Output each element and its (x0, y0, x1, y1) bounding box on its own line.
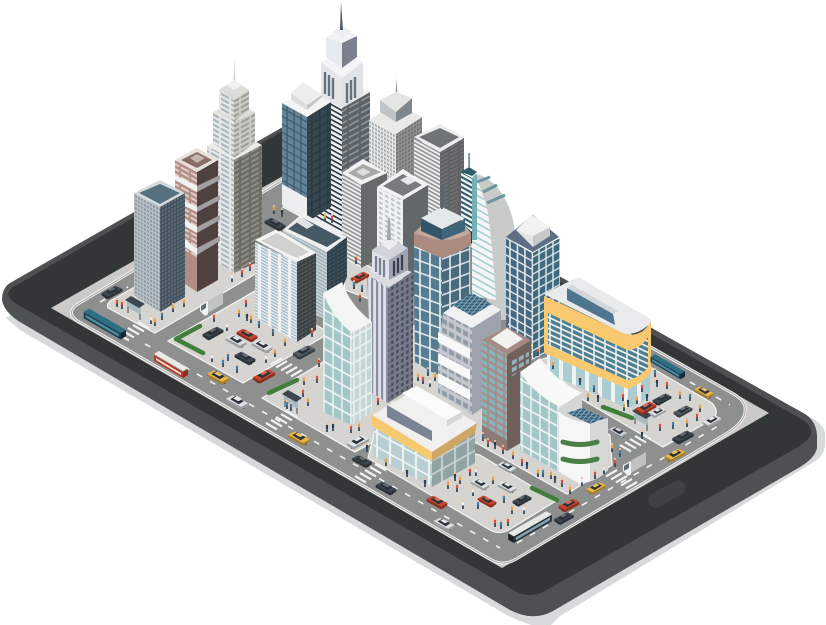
pedestrians (116, 205, 701, 529)
building: low yellow-trim glass hall (372, 386, 477, 487)
building: white front office (255, 229, 316, 342)
tablet screen bezel (8, 128, 811, 595)
building: grey tower with antenna (369, 78, 422, 235)
building: solar roof balcony tower (438, 293, 501, 415)
building: brown balcony tower (175, 148, 220, 292)
icon: tablet home button (646, 478, 688, 510)
building: tall main tower with spire (315, 2, 370, 240)
tablet body (2, 124, 817, 616)
hedges (176, 326, 632, 500)
building: white terraced glass building (520, 358, 608, 484)
building: curved striped sail tower (461, 153, 515, 320)
vehicle: white truck right (623, 451, 648, 476)
vehicle: white bus (508, 511, 552, 543)
crosswalks (118, 322, 651, 488)
building: stepped beige tower with antenna (207, 58, 262, 273)
vehicle: white truck left (200, 291, 225, 316)
cars (102, 218, 721, 531)
building: narrow grey midrise (342, 159, 387, 268)
building: teal low block (283, 213, 347, 320)
building: glass tower with curved white roof (323, 282, 372, 425)
building: dark glass tower (282, 82, 331, 222)
road network (72, 160, 744, 562)
building: curved brown-crowned glass tower (414, 187, 471, 378)
building: yellow curved building (544, 277, 651, 408)
vehicle: blue bus left (84, 309, 126, 339)
bus stops (125, 296, 652, 431)
building: far right grey tower (414, 124, 464, 245)
tablet shadow (6, 130, 825, 625)
building: leftmost slate tower (134, 180, 185, 312)
building: blue glass tower (506, 215, 560, 360)
building: white office tower (377, 169, 428, 300)
building: brown small tower (482, 315, 531, 451)
building: empire-style small tower (367, 218, 413, 403)
vehicle: blue bus right (650, 354, 685, 379)
city ground plate (51, 156, 769, 568)
vehicle: fire truck (154, 351, 188, 378)
road lane markings (100, 287, 730, 548)
sidewalk blocks (108, 195, 716, 533)
